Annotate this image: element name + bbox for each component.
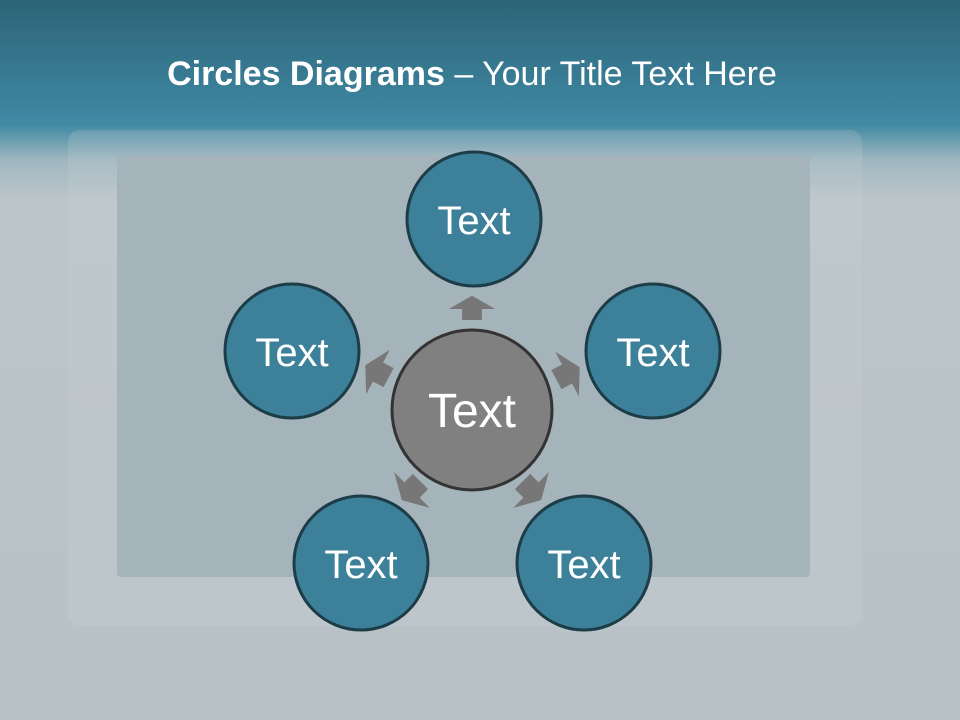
center circle: Text bbox=[428, 385, 516, 438]
tablet screen bbox=[117, 156, 810, 577]
circle: top bbox=[407, 152, 541, 286]
arrow: left bbox=[353, 343, 400, 400]
tablet frame bbox=[68, 130, 862, 626]
arrow: right bbox=[545, 345, 592, 402]
circle: bottom right bbox=[517, 496, 651, 630]
center circle bbox=[392, 330, 552, 490]
circle: left: Text bbox=[255, 331, 329, 375]
circle: bottom left: Text bbox=[324, 543, 398, 587]
circle: left bbox=[225, 284, 359, 418]
arrow: bottom left bbox=[384, 464, 438, 518]
circle: right: Text bbox=[616, 331, 690, 375]
circle: bottom left bbox=[294, 496, 428, 630]
title: Circles Diagrams – Your Title Text Here bbox=[167, 55, 777, 93]
arrow: top bbox=[449, 296, 495, 320]
circle: bottom right: Text bbox=[547, 543, 621, 587]
arrow: bottom right bbox=[505, 464, 559, 518]
circle: right bbox=[586, 284, 720, 418]
circle: top: Text bbox=[437, 199, 511, 243]
